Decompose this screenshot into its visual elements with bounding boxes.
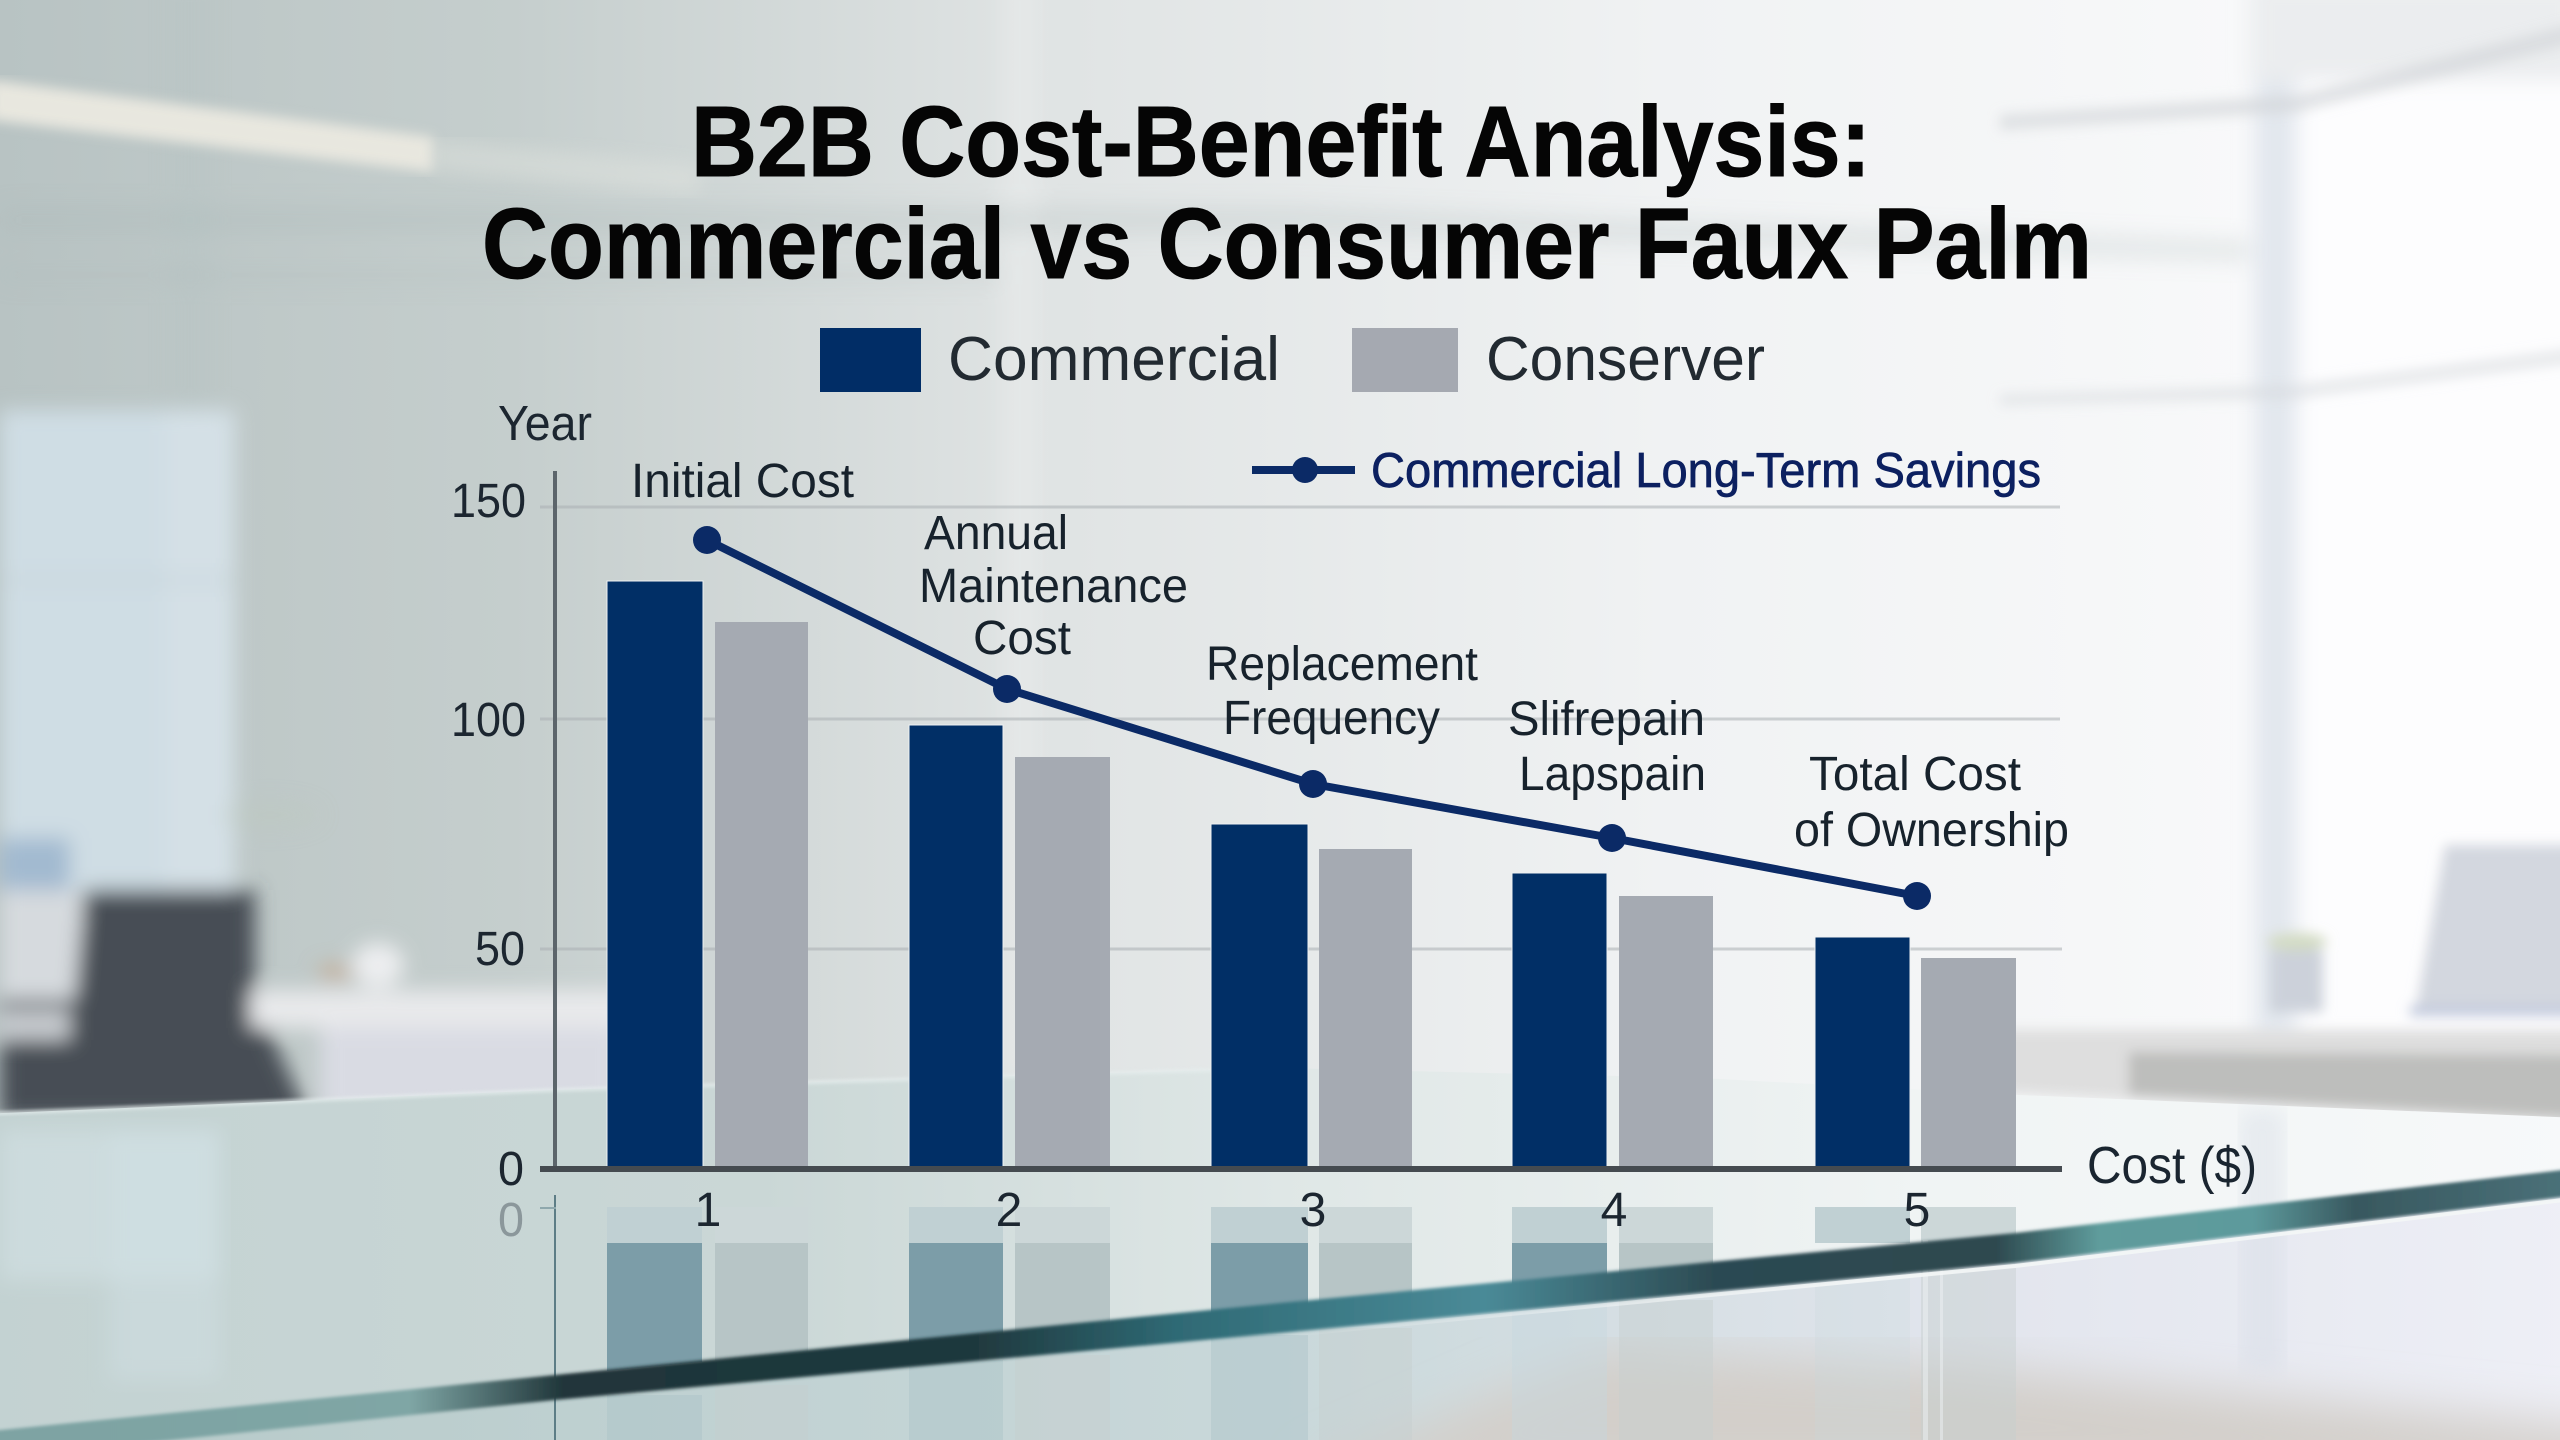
x axis: 1 — [695, 1184, 721, 1237]
y axis — [451, 397, 592, 1247]
x axis: 3 — [1300, 1184, 1326, 1237]
category labels: Cost — [973, 612, 1071, 665]
y axis: 100 — [451, 694, 526, 747]
table front edge — [0, 1168, 2560, 1440]
category labels: Replacement — [1206, 638, 1478, 691]
category labels — [631, 455, 2069, 857]
category labels: Maintenance — [919, 560, 1188, 613]
legend: bar series — [820, 325, 1765, 394]
x axis: Cost ($) — [2087, 1137, 2257, 1195]
title: Commercial vs Consumer Faux Palm — [482, 188, 2092, 300]
x axis: 4 — [1601, 1184, 1627, 1237]
bar reflections in glass — [540, 1195, 2016, 1440]
title — [482, 86, 2092, 300]
category labels: Lapspain — [1519, 748, 1706, 801]
bars: commercial — [607, 581, 1910, 1169]
ceiling light strip — [0, 80, 433, 172]
title: B2B Cost-Benefit Analysis: — [691, 86, 1871, 198]
category labels: Initial Cost — [631, 455, 854, 508]
legend: savings line: Commercial Long-Term Savings — [1371, 444, 2041, 498]
y axis: 0 — [498, 1194, 524, 1247]
savings line — [693, 526, 1931, 910]
bars: consumer — [715, 622, 2016, 1169]
gridlines — [540, 507, 2062, 949]
y axis: 0 — [498, 1143, 524, 1196]
category labels: of Ownership — [1794, 804, 2069, 857]
category labels: Total Cost — [1809, 748, 2021, 801]
category labels: Frequency — [1223, 692, 1440, 745]
y axis: 50 — [475, 923, 525, 976]
x axis: 5 — [1904, 1184, 1930, 1237]
x axis: 2 — [996, 1184, 1022, 1237]
legend: bar series: Conserver — [1486, 325, 1765, 394]
y axis: Year — [498, 397, 592, 451]
y axis: 150 — [451, 475, 526, 528]
legend: bar series: Commercial — [948, 325, 1280, 394]
category labels: Annual — [924, 507, 1068, 560]
category labels: Slifrepain — [1508, 693, 1705, 746]
chart — [451, 397, 2257, 1247]
x axis — [540, 1137, 2257, 1237]
glass table — [0, 1068, 2560, 1440]
